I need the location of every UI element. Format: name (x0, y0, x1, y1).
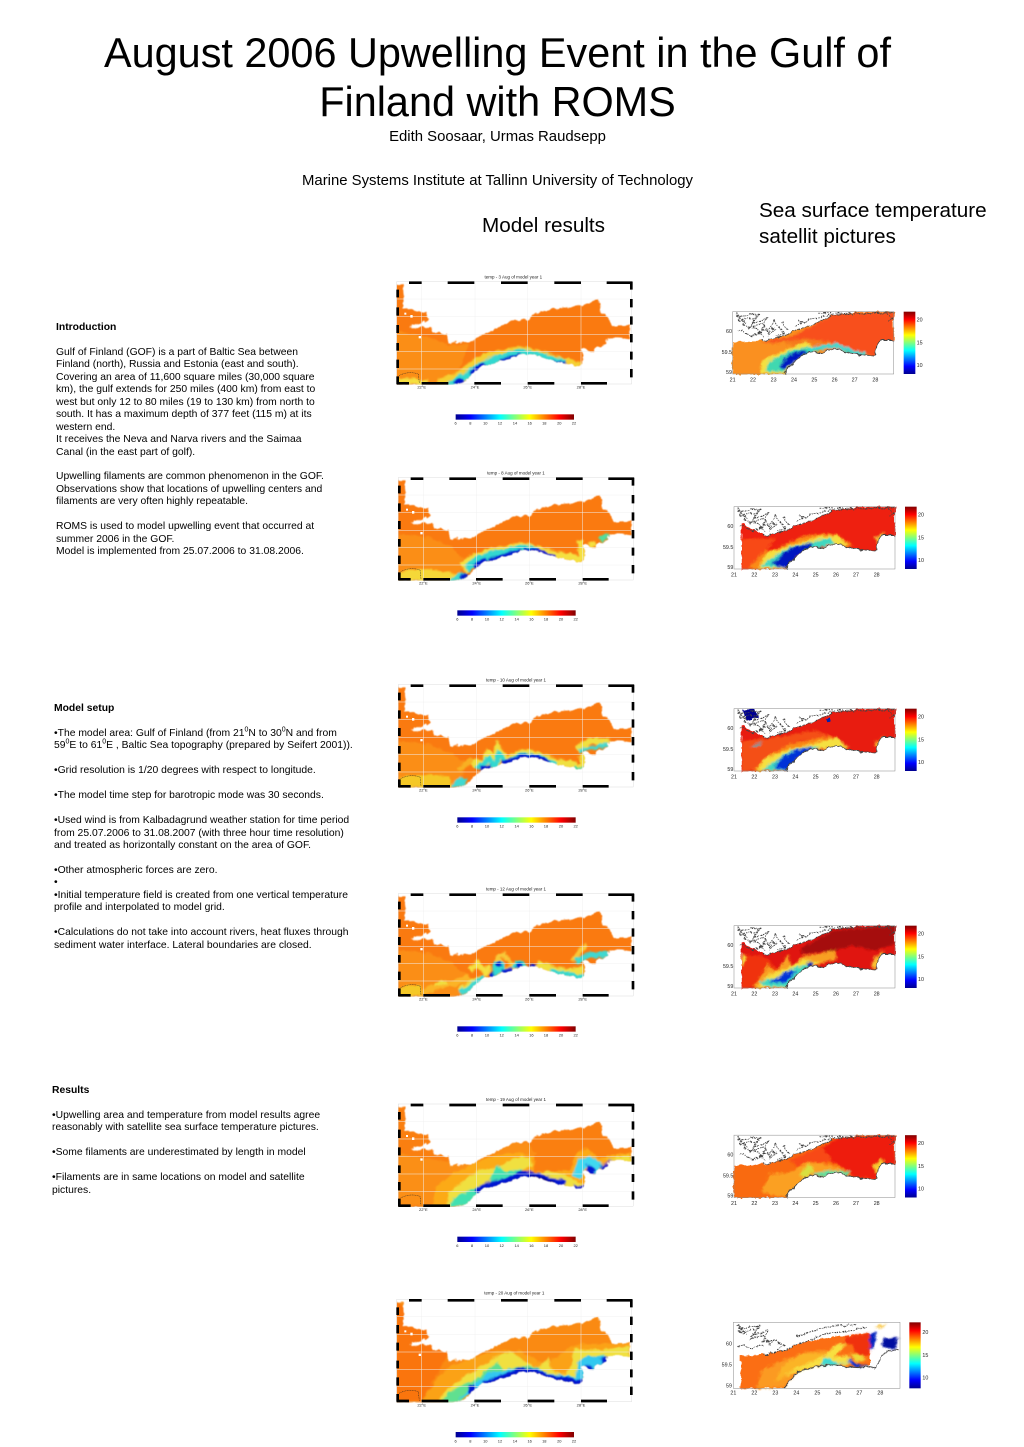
satellite axis labels: 59 (727, 767, 733, 773)
satellite axis labels: 28 (874, 1201, 880, 1207)
text block: model setup: sediment water interface. Lateral boundaries are closed. (54, 940, 312, 951)
text block: introduction: south. It has a maximum depth of 377 feet (115 m) at its (56, 409, 312, 420)
text block: model setup: •Used wind is from Kalbadagrund weather station for time period (54, 815, 349, 826)
axis labels: 26°E (525, 997, 534, 1002)
satellite colorbar labels: 10 (918, 1186, 924, 1192)
satellite axis labels: 23 (772, 1201, 778, 1207)
satellite axis labels: 59.5 (722, 350, 732, 356)
colorbar labels: 8 (471, 824, 474, 829)
satellite axis labels (723, 524, 880, 578)
satellite axis labels: 26 (833, 991, 839, 997)
satellite axis labels: 25 (813, 991, 819, 997)
colorbar labels: 6 (456, 1033, 459, 1038)
text block: results: •Upwelling area and temperature from model results agree (52, 1110, 320, 1121)
model map: 10 Aug (397, 678, 634, 829)
colorbar labels: 8 (469, 1438, 472, 1443)
satellite axis labels: 59.5 (723, 1173, 733, 1179)
satellite map 6 (722, 1322, 928, 1397)
satellite axis labels: 22 (750, 377, 756, 383)
satellite axis labels: 26 (833, 572, 839, 578)
satellite axis labels: 59 (727, 1193, 733, 1199)
satellite colorbar labels: 10 (918, 558, 924, 564)
satellite axis labels (723, 943, 880, 997)
satellite axis labels (722, 1342, 883, 1397)
satellite axis labels: 24 (792, 774, 798, 780)
text block: model setup: from 25.07.2006 to 31.08.2007 (with three hour time resolution) (54, 828, 344, 839)
satellite axis labels: 59 (726, 370, 732, 376)
axis labels: 22°E (417, 385, 426, 390)
satellite axis labels: 28 (874, 572, 880, 578)
axis labels: 26°E (523, 385, 532, 390)
satellite axis labels: 59.5 (722, 1362, 732, 1368)
satellite colorbar labels (918, 1141, 924, 1192)
colorbar labels (456, 617, 579, 622)
satellite colorbar labels: 10 (918, 977, 924, 983)
satellite colorbar labels: 15 (918, 1164, 924, 1170)
satellite colorbar labels: 20 (918, 512, 924, 518)
satellite colorbar labels: 20 (917, 317, 923, 323)
title: Finland with ROMS (319, 79, 676, 125)
satellite map 5 (723, 1135, 924, 1207)
panel title: temp - 3 Aug of model year 1 (485, 275, 543, 280)
satellite colorbar labels (917, 317, 923, 369)
colorbar labels: 12 (499, 1033, 505, 1038)
satellite axis labels: 25 (814, 1391, 820, 1397)
colorbar labels: 12 (498, 1438, 503, 1443)
axis labels: 24°E (472, 1207, 481, 1212)
colorbar labels: 20 (559, 824, 564, 829)
satellite axis labels: 27 (853, 774, 859, 780)
satellite colorbar labels: 15 (922, 1353, 928, 1359)
text block: introduction: Covering an area of 11,600 square miles (30,000 square (56, 372, 315, 383)
title: August 2006 Upwelling Event in the Gulf of (104, 30, 891, 76)
text block: introduction: summer 2006 in the GOF. (56, 534, 174, 545)
panel title: temp - 10 Aug of model year 1 (486, 678, 547, 683)
axis labels: 28°E (578, 1207, 587, 1212)
axis labels: 28°E (577, 385, 586, 390)
text block: results: •Some filaments are underestimated by length in model (52, 1147, 306, 1158)
text block: introduction: km), the gulf extends for 250 miles (400 km) from east to (56, 384, 315, 395)
satellite axis labels: 27 (853, 1201, 859, 1207)
colorbar labels: 20 (557, 1438, 562, 1443)
heading: model results: Model results (482, 214, 605, 237)
colorbar labels: 8 (471, 1243, 474, 1248)
axis labels (419, 788, 587, 793)
satellite axis labels: 59.5 (723, 964, 733, 970)
satellite axis labels: 23 (772, 1391, 778, 1397)
colorbar labels: 6 (455, 1438, 458, 1443)
colorbar labels: 12 (499, 824, 505, 829)
axis labels (419, 1207, 587, 1212)
satellite map 4 (723, 926, 924, 997)
axis labels: 24°E (471, 1402, 480, 1407)
colorbar labels: 16 (529, 824, 534, 829)
colorbar labels: 6 (456, 824, 459, 829)
satellite axis labels: 26 (835, 1391, 841, 1397)
text block: model setup (54, 703, 353, 951)
satellite colorbar labels: 15 (918, 954, 924, 960)
colorbar labels: 14 (514, 1033, 520, 1038)
panel title: temp - 8 Aug of model year 1 (487, 471, 545, 476)
satellite map 2 (723, 507, 924, 578)
satellite colorbar labels: 10 (918, 760, 924, 766)
satellite axis labels: 25 (813, 572, 819, 578)
satellite map 1 (722, 312, 923, 383)
text block: results: reasonably with satellite sea surface temperature pictures. (52, 1122, 319, 1133)
heading: satellite pictures (759, 199, 987, 248)
satellite axis labels: 24 (792, 572, 798, 578)
colorbar labels: 16 (527, 1438, 533, 1443)
text block: model setup: •Other atmospheric forces are zero. (54, 865, 217, 876)
satellite axis labels: 24 (792, 1201, 798, 1207)
satellite axis labels (723, 726, 880, 780)
panel title: temp - 12 Aug of model year 1 (486, 887, 547, 892)
satellite colorbar labels: 10 (917, 363, 923, 369)
satellite axis labels: 23 (772, 572, 778, 578)
satellite colorbar labels: 20 (918, 1141, 924, 1147)
text block: introduction: It receives the Neva and Narva rivers and the Saimaa (56, 434, 302, 445)
text block: model setup: and treated as horizontally constant on the area of GOF. (54, 840, 311, 851)
heading: satellite pictures: Sea surface temperature (759, 199, 987, 222)
colorbar labels: 16 (529, 1033, 534, 1038)
text block: model setup: •Initial temperature field is created from one vertical temperature (54, 890, 348, 901)
text block: model setup: 590E to 610E , Baltic Sea topography (prepared by Seifert 2001)). (54, 739, 353, 751)
axis labels: 22°E (419, 581, 428, 586)
colorbar labels: 18 (542, 1438, 547, 1443)
text block: model setup: •Grid resolution is 1/20 degrees with respect to longitude. (54, 765, 316, 776)
colorbar labels: 20 (559, 617, 564, 622)
satellite axis labels: 26 (832, 377, 838, 383)
satellite axis labels: 28 (874, 774, 880, 780)
colorbar labels: 10 (483, 1438, 488, 1443)
text block: results: Results (52, 1085, 89, 1096)
satellite axis labels: 28 (874, 991, 880, 997)
satellite axis labels: 23 (771, 377, 777, 383)
satellite axis labels: 25 (813, 774, 819, 780)
satellite axis labels: 27 (856, 1391, 862, 1397)
satellite axis labels: 60 (727, 726, 733, 732)
colorbar labels: 22 (572, 1438, 577, 1443)
colorbar labels: 22 (573, 1243, 579, 1248)
panel title: temp - 20 Aug of model year 1 (484, 1291, 545, 1296)
satellite axis labels: 23 (772, 774, 778, 780)
text block: introduction: west but only 12 to 80 miles (19 to 130 km) from north to (56, 397, 315, 408)
colorbar labels: 22 (573, 824, 579, 829)
satellite axis labels: 27 (853, 572, 859, 578)
axis labels: 28°E (577, 1402, 586, 1407)
satellite axis labels: 25 (811, 377, 817, 383)
satellite colorbar labels: 15 (917, 340, 923, 346)
text block: introduction: western end. (56, 422, 115, 433)
satellite colorbar labels: 20 (922, 1330, 928, 1336)
satellite axis labels: 23 (772, 991, 778, 997)
colorbar labels (456, 1243, 579, 1248)
satellite axis labels: 24 (792, 991, 798, 997)
colorbar labels (456, 1033, 579, 1038)
text block: introduction: Gulf of Finland (GOF) is a part of Baltic Sea between (56, 347, 298, 358)
axis labels: 22°E (419, 1207, 428, 1212)
text block: model setup: • (54, 877, 58, 888)
satellite colorbar labels: 10 (922, 1376, 928, 1382)
colorbar labels: 16 (529, 617, 534, 622)
text block: model setup: profile and interpolated to model grid. (54, 902, 225, 913)
colorbar labels: 10 (485, 824, 490, 829)
colorbar labels: 22 (573, 1033, 579, 1038)
colorbar labels: 10 (485, 1033, 490, 1038)
satellite axis labels: 21 (731, 572, 737, 578)
colorbar labels: 6 (456, 1243, 459, 1248)
text block: results: pictures. (52, 1185, 91, 1196)
colorbar labels: 14 (514, 824, 520, 829)
satellite axis labels: 25 (813, 1201, 819, 1207)
satellite axis labels: 60 (727, 943, 733, 949)
text block: introduction: ROMS is used to model upwelling event that occurred at (56, 521, 314, 532)
axis labels (417, 1402, 586, 1407)
text block: results: •Filaments are in same locations on model and satellite (52, 1172, 305, 1183)
colorbar labels: 6 (455, 421, 458, 426)
axis labels: 22°E (417, 1402, 426, 1407)
colorbar labels: 10 (485, 617, 490, 622)
satellite axis labels: 24 (793, 1391, 799, 1397)
axis labels: 24°E (471, 385, 480, 390)
text block: introduction: filaments are very often highly repeatable. (56, 496, 248, 507)
satellite axis labels: 59 (727, 565, 733, 571)
colorbar labels: 18 (544, 1243, 549, 1248)
text block: introduction: Canal (in the east part of golf). (56, 447, 195, 458)
text block: model setup: •The model time step for barotropic mode was 30 seconds. (54, 790, 324, 801)
axis labels: 26°E (523, 1402, 532, 1407)
satellite colorbar labels (918, 931, 924, 983)
satellite axis labels: 27 (853, 991, 859, 997)
satellite axis labels: 59.5 (723, 545, 733, 551)
axis labels: 22°E (419, 997, 428, 1002)
axis labels: 28°E (578, 581, 587, 586)
colorbar labels: 18 (542, 421, 547, 426)
satellite colorbar labels (918, 512, 924, 564)
satellite axis labels: 27 (852, 377, 858, 383)
colorbar labels: 22 (572, 421, 577, 426)
authors: Edith Soosaar, Urmas Raudsepp (389, 129, 606, 145)
axis labels (419, 581, 587, 586)
colorbar labels: 8 (471, 1033, 474, 1038)
satellite colorbar labels: 15 (918, 535, 924, 541)
axis labels: 22°E (419, 788, 428, 793)
satellite map 3 (723, 709, 924, 780)
satellite colorbar labels: 15 (918, 737, 924, 743)
axis labels: 24°E (472, 788, 481, 793)
axis labels: 24°E (472, 581, 481, 586)
text block: introduction: Observations show that locations of upwelling centers and (56, 484, 322, 495)
satellite axis labels: 26 (833, 1201, 839, 1207)
satellite axis labels: 21 (730, 377, 736, 383)
satellite axis labels: 26 (833, 774, 839, 780)
axis labels (417, 385, 586, 390)
colorbar labels: 14 (514, 617, 520, 622)
satellite axis labels: 59 (726, 1383, 732, 1389)
colorbar labels: 16 (527, 421, 533, 426)
text block: results (52, 1085, 320, 1196)
axis labels: 26°E (525, 1207, 534, 1212)
colorbar labels: 12 (499, 1243, 505, 1248)
satellite axis labels: 59 (727, 984, 733, 990)
colorbar labels (455, 1438, 577, 1443)
colorbar labels: 8 (471, 617, 474, 622)
axis labels: 24°E (472, 997, 481, 1002)
colorbar labels (455, 421, 577, 426)
satellite axis labels: 28 (872, 377, 878, 383)
satellite axis labels: 21 (731, 991, 737, 997)
model map: 19 Aug (397, 1097, 634, 1248)
colorbar labels: 18 (544, 1033, 549, 1038)
satellite axis labels: 22 (751, 1391, 757, 1397)
satellite axis labels: 22 (751, 572, 757, 578)
institute: Marine Systems Institute at Tallinn University of Technology (302, 173, 693, 189)
axis labels: 26°E (525, 788, 534, 793)
satellite axis labels: 21 (731, 1201, 737, 1207)
axis labels: 26°E (525, 581, 534, 586)
colorbar labels: 22 (573, 617, 579, 622)
satellite axis labels: 60 (727, 524, 733, 530)
satellite axis labels: 60 (726, 329, 732, 335)
colorbar labels: 16 (529, 1243, 534, 1248)
colorbar labels: 12 (498, 421, 503, 426)
axis labels: 28°E (578, 997, 587, 1002)
colorbar labels: 20 (559, 1033, 564, 1038)
satellite axis labels (723, 1152, 880, 1207)
axis labels (419, 997, 587, 1002)
colorbar labels: 18 (544, 617, 549, 622)
colorbar labels: 8 (469, 421, 472, 426)
text block: introduction: Upwelling filaments are common phenomenon in the GOF. (56, 471, 324, 482)
colorbar labels (456, 824, 579, 829)
colorbar labels: 18 (544, 824, 549, 829)
text block: introduction (56, 322, 324, 557)
model map: 3 Aug (395, 275, 633, 426)
model map: 8 Aug (397, 471, 634, 622)
satellite colorbar labels (922, 1330, 928, 1382)
satellite axis labels: 59.5 (723, 747, 733, 753)
colorbar labels: 20 (557, 421, 562, 426)
satellite axis labels: 28 (877, 1391, 883, 1397)
satellite colorbar labels (918, 714, 924, 766)
satellite colorbar labels: 20 (918, 714, 924, 720)
satellite axis labels (722, 329, 878, 383)
model map: 12 Aug (397, 887, 634, 1038)
satellite axis labels: 22 (751, 774, 757, 780)
title (104, 30, 892, 125)
text block: model setup: •The model area: Gulf of Finland (from 210N to 300N and from (54, 726, 337, 739)
heading: satellite pictures: satellit pictures (759, 224, 896, 248)
satellite axis labels: 24 (791, 377, 797, 383)
colorbar labels: 14 (514, 1243, 520, 1248)
satellite axis labels: 21 (731, 774, 737, 780)
text block: model setup: Model setup (54, 703, 114, 714)
satellite axis labels: 60 (726, 1342, 732, 1348)
satellite axis labels: 22 (751, 991, 757, 997)
satellite colorbar labels: 20 (918, 931, 924, 937)
text block: introduction: Introduction (56, 322, 116, 333)
panel title: temp - 19 Aug of model year 1 (486, 1097, 547, 1102)
colorbar labels: 20 (559, 1243, 564, 1248)
model map: 20 Aug (395, 1291, 633, 1443)
axis labels: 28°E (578, 788, 587, 793)
colorbar labels: 10 (485, 1243, 490, 1248)
text block: model setup: •Calculations do not take into account rivers, heat fluxes through (54, 927, 349, 938)
satellite axis labels: 22 (751, 1201, 757, 1207)
satellite axis labels: 60 (727, 1152, 733, 1158)
colorbar labels: 14 (513, 1438, 518, 1443)
colorbar labels: 14 (513, 421, 518, 426)
text block: introduction: Finland (north), Russia and Estonia (east and south). (56, 359, 299, 370)
text block: introduction: Model is implemented from 25.07.2006 to 31.08.2006. (56, 546, 304, 557)
colorbar labels: 12 (499, 617, 505, 622)
colorbar labels: 10 (483, 421, 488, 426)
satellite axis labels: 21 (730, 1391, 736, 1397)
colorbar labels: 6 (456, 617, 459, 622)
